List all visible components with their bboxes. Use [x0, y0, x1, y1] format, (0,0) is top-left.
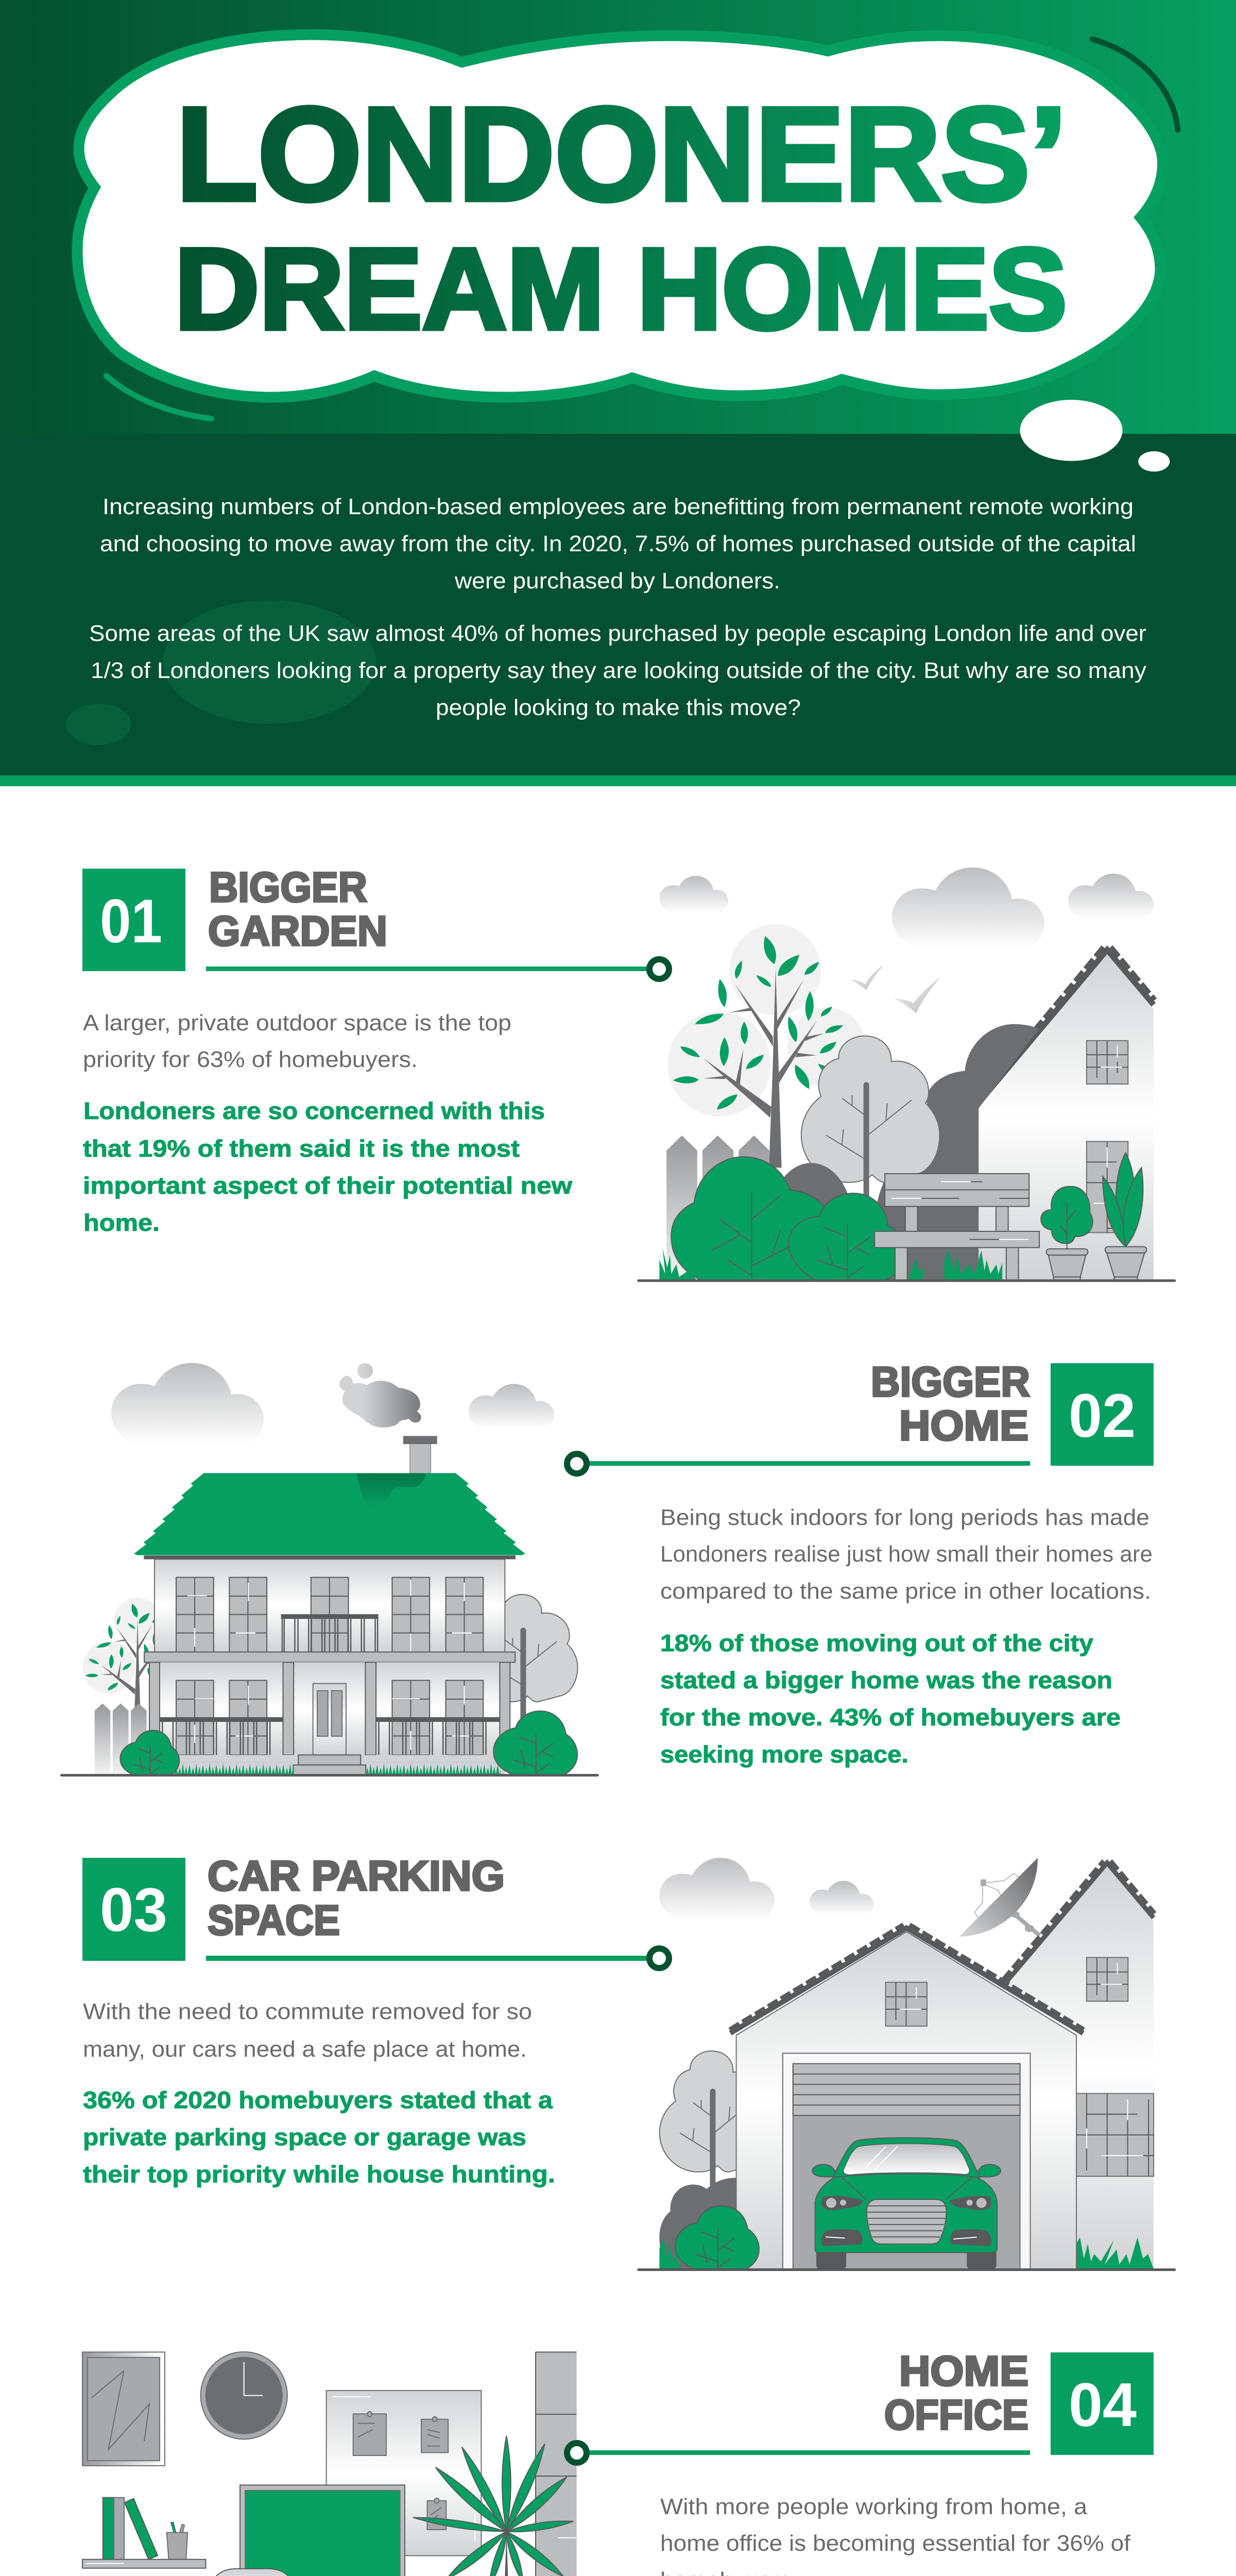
text block: Being stuck indoors for long periods has made: [660, 1505, 1149, 1530]
computer monitor: [240, 2485, 405, 2576]
text block: [83, 1010, 511, 1072]
fence: [95, 1703, 147, 1775]
illustration: garden: [639, 868, 1175, 1281]
dark hump: [770, 1163, 852, 1279]
text block: A larger, private outdoor space is the top: [83, 1010, 511, 1036]
connector line: [206, 1948, 669, 1968]
green stat text: home.: [83, 1209, 160, 1236]
heading: car parking space: CAR PARKING: [208, 1853, 505, 1900]
window: [520, 2352, 577, 2576]
intro text: Some areas of the UK saw almost 40% of homes purchased by people escaping London life and over: [89, 621, 1146, 646]
intro text: people looking to make this move?: [436, 695, 801, 720]
connector line: [206, 959, 669, 979]
grass: [659, 1248, 1002, 1280]
green stat text: Londoners are so concerned with this: [83, 1097, 545, 1124]
text block: With the need to commute removed for so: [83, 1999, 532, 2024]
intro text: 1/3 of Londoners looking for a property say they are looking outside of the city. But why are so many: [91, 658, 1146, 683]
thought cloud: [77, 35, 1178, 471]
dark bush: [876, 1024, 1039, 1280]
heading: bigger home: HOME: [899, 1402, 1028, 1449]
number badge 03: [82, 1858, 185, 1961]
panel: 04 home office: [61, 2348, 1154, 2576]
intro text: [89, 494, 1146, 720]
potted plants: [1041, 1153, 1146, 1280]
birds: [851, 965, 941, 1013]
panel: 03 car parking space: [82, 1853, 1175, 2270]
text block: priority for 63% of homebuyers.: [83, 1047, 418, 1072]
panel: 01 bigger garden: [82, 864, 1175, 1281]
heading: bigger home: [871, 1359, 1030, 1449]
header panel: [0, 0, 1236, 786]
green stat text: 36% of 2020 homebuyers stated that a: [83, 2087, 553, 2113]
dark bush: [659, 2178, 736, 2269]
green stat text: important aspect of their potential new: [83, 1172, 572, 1199]
leafy tree small: [82, 1598, 184, 1719]
heading: home office: OFFICE: [884, 2392, 1028, 2438]
chimney: [403, 1436, 437, 1473]
number badge 02: 02: [1069, 1381, 1136, 1450]
wall clock: [201, 2352, 287, 2439]
green stat text: stated a bigger home was the reason: [660, 1667, 1112, 1693]
text block: With more people working from home, a: [660, 2494, 1088, 2519]
green bushes: [120, 1711, 577, 1775]
heading: bigger garden: GARDEN: [208, 908, 387, 955]
green stat text: [83, 1097, 572, 1236]
green stat text: 18% of those moving out of the city: [660, 1630, 1093, 1656]
number badge 04: 04: [1069, 2370, 1137, 2439]
bench: [874, 1174, 1039, 1280]
picture frame: [82, 2352, 165, 2466]
chimney smoke: [339, 1363, 421, 1428]
house: [975, 948, 1154, 1280]
car: [812, 2138, 1001, 2269]
heading: car parking space: [208, 1853, 505, 1944]
clouds: [659, 868, 1154, 949]
shelf with books: [82, 2498, 205, 2568]
intro text: Increasing numbers of London-based employees are benefitting from permanent remote working: [102, 494, 1134, 519]
number badge 03: 03: [100, 1875, 167, 1944]
number badge 01: 01: [100, 887, 162, 956]
decorative background bubbles: [66, 600, 376, 745]
green bush and grass: [659, 2206, 759, 2270]
garage: [730, 1926, 1083, 2269]
green stat text: seeking more space.: [660, 1741, 908, 1768]
heading: bigger garden: BIGGER: [209, 864, 367, 911]
text block: [83, 1999, 532, 2062]
green bushes: [671, 1157, 900, 1280]
foundation and steps: [154, 1755, 505, 1775]
heading: car parking space: SPACE: [208, 1897, 340, 1944]
back house: [1004, 1861, 1154, 2269]
text block: home office is becoming essential for 36% of: [660, 2531, 1131, 2556]
intro text: were purchased by Londoners.: [454, 568, 780, 594]
grey tree: [801, 1036, 939, 1217]
clouds: [111, 1363, 554, 1445]
notice board: [327, 2391, 481, 2555]
green stat text: private parking space or garage was: [83, 2124, 526, 2150]
title: [175, 79, 1067, 353]
green stat text: their top priority while house hunting.: [83, 2161, 555, 2188]
connector line: [567, 1454, 1030, 1473]
heading: home office: [884, 2348, 1028, 2438]
green stat text: for the move. 43% of homebuyers are: [660, 1704, 1121, 1731]
heading: bigger home: BIGGER: [871, 1359, 1030, 1405]
illustration: home office: [61, 2352, 597, 2576]
text block: [660, 2494, 1131, 2576]
grey tree right: [475, 1595, 578, 1727]
satellite dish: [959, 1858, 1040, 1937]
connector line: [567, 2443, 1030, 2463]
heading: bigger garden: [208, 864, 387, 955]
chair: [201, 2569, 304, 2576]
green stat text: [83, 2087, 555, 2188]
leafy tree: [667, 924, 866, 1167]
green stat text: [660, 1630, 1121, 1768]
fence: [666, 1136, 769, 1280]
title: DREAM HOMES: [175, 225, 1067, 353]
heading: home office: HOME: [899, 2348, 1028, 2395]
text block: Londoners realise just how small their homes are: [660, 1541, 1153, 1567]
intro text: and choosing to move away from the city. In 2020, 7.5% of homes purchased outside of the capital: [100, 531, 1136, 556]
upper floor: [144, 1560, 515, 1662]
number badge 02: [1051, 1363, 1154, 1466]
palm plant: [413, 2436, 574, 2576]
number badge 04: [1051, 2352, 1154, 2455]
illustration: large house: [61, 1363, 597, 1775]
green roof: [134, 1473, 525, 1560]
title: LONDONERS’: [176, 79, 1067, 228]
illustration: garage and car: [639, 1858, 1175, 2270]
green stat text: that 19% of them said it is the most: [83, 1135, 520, 1162]
grey tree: [660, 2051, 772, 2201]
clouds: [659, 1858, 873, 1920]
text block: many, our cars need a safe place at home.: [83, 2037, 527, 2062]
text block: compared to the same price in other locations.: [660, 1579, 1151, 1604]
text block: [660, 1505, 1153, 1604]
number badge 01: [82, 869, 185, 971]
panel: 02 bigger home: [61, 1359, 1154, 1775]
ground floor: [149, 1662, 510, 1755]
